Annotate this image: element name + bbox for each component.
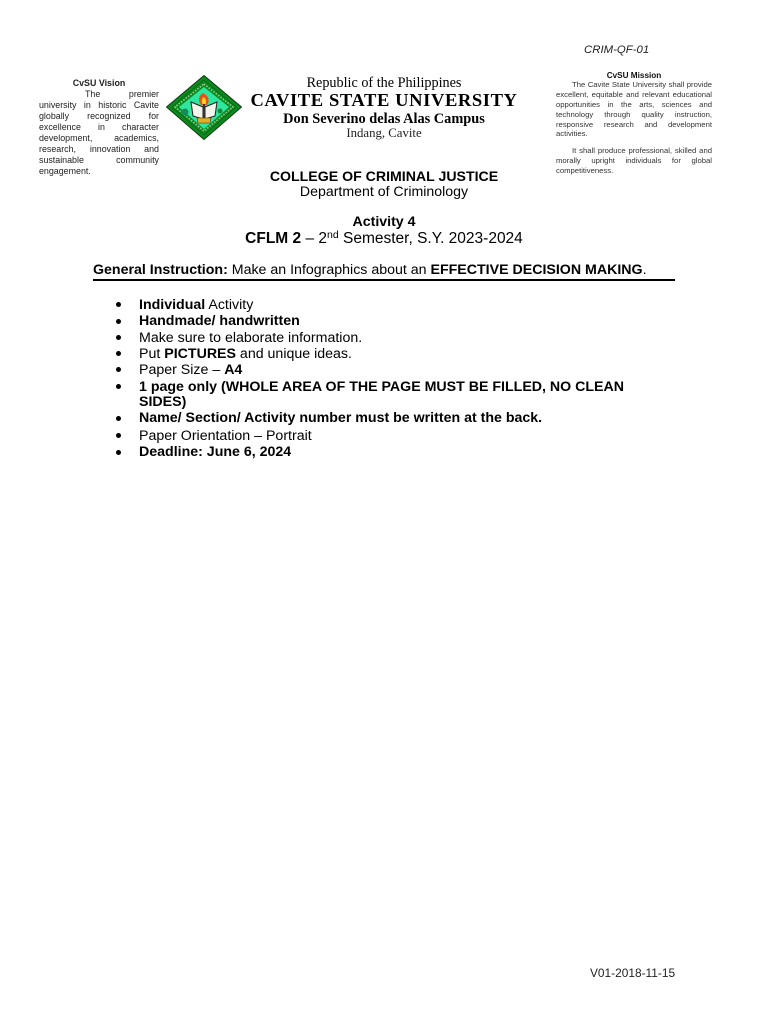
- bulleted instruction list: 1 page only (WHOLE AREA OF THE PAGE MUST BE FILLED, NO CLEAN: [139, 379, 624, 395]
- bulleted instruction list: Handmade/ handwritten: [139, 313, 300, 329]
- panel: CvSU mission: [556, 71, 712, 175]
- panel: CvSU vision: CvSU Vision: [73, 78, 125, 88]
- panel: CvSU vision: development, academics,: [39, 133, 159, 143]
- heading: college and department: Department of Criminology: [300, 183, 468, 199]
- campus name: Don Severino delas Alas Campus: [283, 110, 485, 126]
- university name: CAVITE STATE UNIVERSITY: [250, 90, 518, 110]
- republic line: Republic of the Philippines: [307, 75, 461, 91]
- panel: CvSU vision: university in historic Cavite: [39, 100, 159, 110]
- bulleted instruction list: SIDES): [139, 394, 186, 410]
- panel: CvSU vision: The premier: [85, 89, 159, 99]
- panel: CvSU mission: It shall produce professional, skilled and: [572, 146, 712, 155]
- heading: activity title: Activity 4: [352, 214, 416, 230]
- heading: college and department: COLLEGE OF CRIMINAL JUSTICE: [270, 168, 498, 184]
- panel: CvSU mission: technology through quality instruction,: [556, 110, 712, 119]
- panel: CvSU vision: research, innovation and: [39, 144, 159, 154]
- panel: CvSU vision: [39, 78, 159, 176]
- bulleted instruction list: [116, 297, 624, 460]
- bulleted instruction list: Name/ Section/ Activity number must be written at the back.: [139, 410, 542, 426]
- bulleted instruction list: Deadline: June 6, 2024: [139, 444, 291, 460]
- panel: CvSU mission: excellent, equitable and relevant educational: [556, 90, 712, 99]
- bulleted instruction list: Paper Orientation – Portrait: [139, 428, 312, 444]
- bulleted instruction list: Paper Size – A4: [139, 362, 242, 378]
- panel: CvSU vision: excellence in character: [39, 122, 159, 132]
- panel: CvSU mission: opportunities in the arts, sciences and: [556, 100, 712, 109]
- heading: college and department: [270, 168, 498, 199]
- general instruction: General Instruction: Make an Infographics about an EFFECTIVE DECISION MAKING.: [93, 262, 647, 278]
- panel: CvSU vision: globally recognized for: [39, 111, 159, 121]
- form code: CRIM-QF-01: [584, 44, 649, 56]
- heading: university letterhead: [250, 75, 518, 140]
- panel: CvSU mission: responsive research and development: [556, 120, 712, 128]
- panel: CvSU vision: sustainable community: [39, 155, 159, 165]
- panel: CvSU mission: CvSU Mission: [607, 71, 661, 80]
- footer version code: V01-2018-11-15: [590, 966, 675, 980]
- panel: CvSU mission: activities.: [556, 129, 588, 138]
- bulleted instruction list: Make sure to elaborate information.: [139, 330, 362, 346]
- campus location: Indang, Cavite: [346, 126, 422, 140]
- heading: activity title: CFLM 2 – 2nd Semester, S.Y. 2023-2024: [245, 229, 523, 247]
- icon: university seal: [166, 75, 242, 140]
- bulleted instruction list: Put PICTURES and unique ideas.: [139, 346, 352, 362]
- bulleted instruction list: Individual Activity: [139, 297, 253, 313]
- heading: activity title: [245, 214, 523, 247]
- panel: CvSU mission: competitiveness.: [556, 166, 613, 175]
- panel: CvSU mission: morally upright individuals for global: [556, 156, 712, 165]
- panel: CvSU mission: The Cavite State University shall provide: [572, 80, 712, 89]
- panel: CvSU vision: engagement.: [39, 166, 91, 176]
